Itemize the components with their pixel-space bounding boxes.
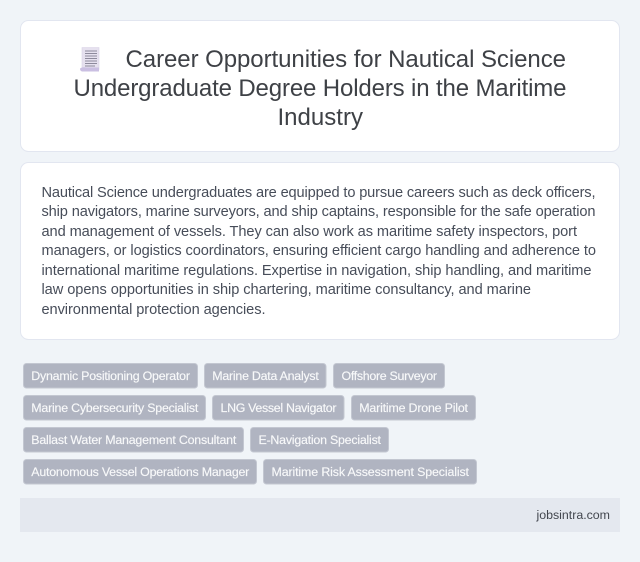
icon: scroll document (80, 48, 99, 72)
panel: title header (20, 20, 620, 152)
tag: Ballast Water Management Consultant: Ballast Water Management Consultant (31, 433, 237, 447)
description text: Nautical Science undergraduates are equipped to pursue careers such as deck officers, (42, 185, 596, 201)
tag: Maritime Drone Pilot (352, 396, 476, 420)
description text: managers, or logistics coordinators, ensuring efficient cargo handling and adherence to (42, 243, 596, 259)
description text: law opens opportunities in ship chartering, maritime consultancy, and marine (42, 282, 531, 298)
description text: environmental protection agencies. (42, 302, 266, 318)
tag: Offshore Surveyor (334, 364, 444, 388)
tag: Marine Cybersecurity Specialist (24, 396, 206, 420)
tag: Maritime Risk Assessment Specialist: Maritime Risk Assessment Specialist (272, 465, 470, 479)
title text (74, 46, 566, 131)
tag: Ballast Water Management Consultant (24, 428, 244, 452)
tag: LNG Vessel Navigator (212, 396, 344, 420)
description text: ship navigators, marine surveyors, and ship captains, responsible for the safe operation (42, 204, 596, 220)
description text: and management of vessels. They can also work as maritime safety inspectors, port (42, 224, 577, 240)
panel: description (20, 162, 620, 340)
description text (42, 185, 596, 318)
footer source text: jobsintra.com (536, 508, 610, 522)
title text: Career Opportunities for Nautical Science (126, 46, 566, 73)
tag: Dynamic Positioning Operator: Dynamic Positioning Operator (31, 369, 190, 383)
tag: LNG Vessel Navigator: LNG Vessel Navigator (220, 401, 336, 415)
tag: Offshore Surveyor: Offshore Surveyor (342, 369, 437, 383)
tag list (24, 364, 476, 484)
tag: Autonomous Vessel Operations Manager (24, 460, 256, 484)
tag: Dynamic Positioning Operator (24, 364, 198, 388)
footer bar (20, 498, 620, 532)
title text: Industry (278, 104, 363, 131)
tag: E-Navigation Specialist (250, 428, 388, 452)
tag: Maritime Risk Assessment Specialist (264, 460, 476, 484)
title text: Undergraduate Degree Holders in the Maritime (74, 75, 566, 102)
tag: Marine Cybersecurity Specialist: Marine Cybersecurity Specialist (31, 401, 199, 415)
tag: Marine Data Analyst: Marine Data Analyst (212, 369, 319, 383)
tag: Maritime Drone Pilot: Maritime Drone Pilot (359, 401, 469, 415)
tag: Marine Data Analyst (204, 364, 326, 388)
tag: Autonomous Vessel Operations Manager: Autonomous Vessel Operations Manager (31, 465, 249, 479)
description text: international maritime regulations. Expertise in navigation, ship handling, and maritime (42, 263, 592, 279)
tag: E-Navigation Specialist: E-Navigation Specialist (258, 433, 382, 447)
